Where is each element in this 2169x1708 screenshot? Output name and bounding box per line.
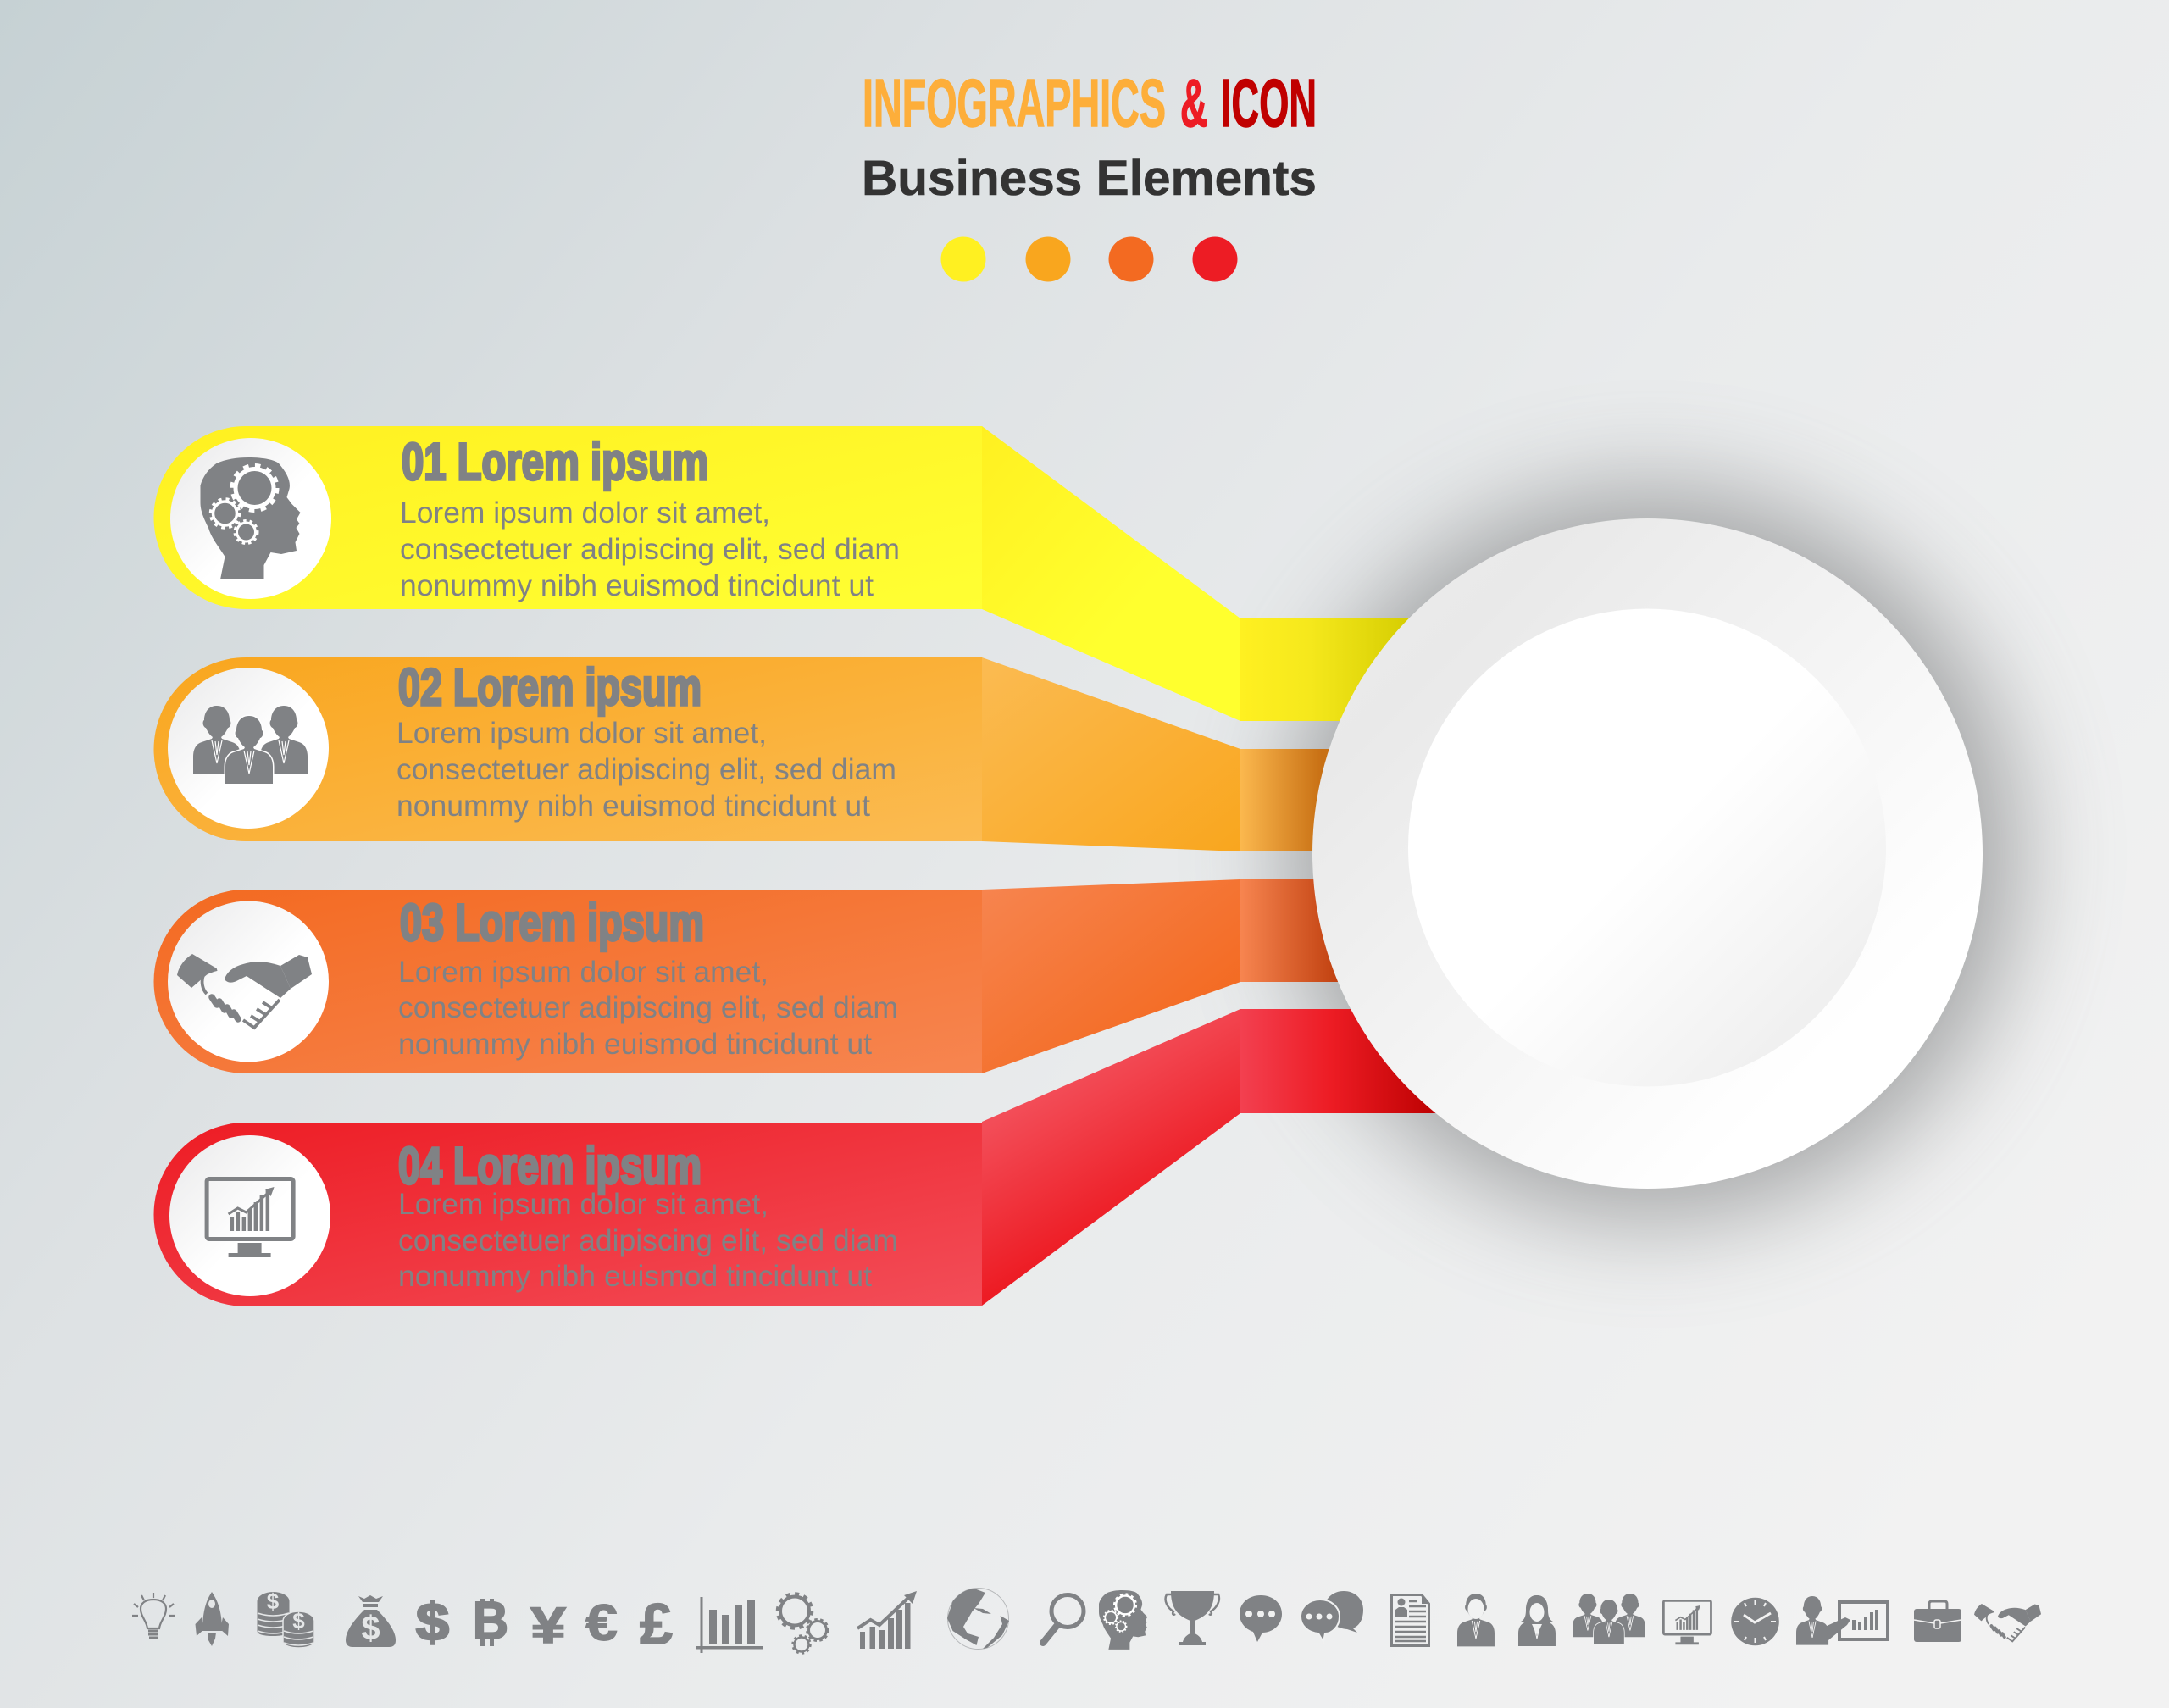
central disc xyxy=(1312,518,1983,1189)
icon: team small xyxy=(1573,1594,1645,1644)
title: INFOGRAPHICS xyxy=(863,65,1166,141)
icon: globe xyxy=(947,1588,1009,1649)
panel: step 03 xyxy=(154,879,1356,1073)
icon: bar chart xyxy=(696,1597,763,1653)
icon: light bulb xyxy=(132,1593,175,1638)
panel: step 02 xyxy=(154,657,1356,851)
icon: monitor chart small xyxy=(1663,1600,1711,1644)
icon: briefcase xyxy=(1914,1601,1961,1642)
text block 01: consectetuer adipiscing elit, sed diam xyxy=(400,533,900,566)
title: & xyxy=(1180,65,1207,141)
icon: dollar: $ xyxy=(416,1594,449,1652)
icon: trophy xyxy=(1166,1591,1219,1645)
icon: growth chart xyxy=(857,1591,917,1649)
text block 02: consectetuer adipiscing elit, sed diam xyxy=(397,753,896,786)
icon: coin stacks: $ xyxy=(267,1589,280,1614)
icon: conversation xyxy=(1301,1591,1363,1642)
icon: coin stacks: $ xyxy=(292,1608,305,1633)
heading 02: 02 Lorem ipsum xyxy=(398,658,702,716)
icon: resume document xyxy=(1391,1594,1429,1645)
colour dots xyxy=(940,237,1237,281)
heading 03: 03 Lorem ipsum xyxy=(400,894,704,951)
icon: monitor chart xyxy=(207,1179,293,1257)
icon: euro: € xyxy=(585,1594,618,1651)
icon: presenter xyxy=(1796,1596,1888,1645)
icon: rocket xyxy=(195,1592,229,1646)
panel: step 04 xyxy=(154,1009,1457,1306)
text block 01: Lorem ipsum dolor sit amet, xyxy=(400,496,770,530)
icon: team xyxy=(193,706,308,784)
icon: gears xyxy=(778,1594,829,1654)
icon: handshake small xyxy=(1974,1604,2041,1641)
text block 03 xyxy=(398,956,898,1061)
icon: clock xyxy=(1731,1598,1779,1645)
icon: coin stacks xyxy=(258,1589,314,1648)
text block 04: nonummy nibh euismod tincidunt ut xyxy=(398,1260,872,1293)
text block 02: nonummy nibh euismod tincidunt ut xyxy=(397,790,870,823)
icon: speech bubble xyxy=(1240,1595,1282,1642)
text block 03: nonummy nibh euismod tincidunt ut xyxy=(398,1028,872,1061)
text block 01: nonummy nibh euismod tincidunt ut xyxy=(400,569,874,602)
text block 02 xyxy=(397,717,896,823)
icon: businesswoman xyxy=(1518,1595,1556,1646)
icon: businessman xyxy=(1457,1594,1495,1646)
heading 01: 01 Lorem ipsum xyxy=(402,433,708,491)
disc shadow xyxy=(1288,490,2016,1218)
text block 04: Lorem ipsum dolor sit amet, xyxy=(398,1188,768,1221)
icon: magnifier xyxy=(1043,1594,1084,1643)
icon: yen: ¥ xyxy=(530,1597,567,1654)
subtitle: Business Elements xyxy=(862,151,1317,206)
icon: money bag: $ xyxy=(361,1610,380,1647)
icon: head with gears small xyxy=(1099,1590,1147,1650)
text block 04 xyxy=(398,1188,898,1293)
title: ICON xyxy=(1221,65,1317,141)
text block 02: Lorem ipsum dolor sit amet, xyxy=(397,717,767,750)
icon: money bag xyxy=(346,1595,396,1647)
heading 04: 04 Lorem ipsum xyxy=(398,1137,702,1195)
icon: bitcoin: B xyxy=(473,1592,508,1650)
icon row xyxy=(132,1588,2041,1656)
text block 04: consectetuer adipiscing elit, sed diam xyxy=(398,1224,898,1257)
icon: handshake xyxy=(177,954,312,1028)
icon: head with gears xyxy=(200,458,300,580)
text block 03: Lorem ipsum dolor sit amet, xyxy=(398,956,768,989)
panel: step 01 xyxy=(154,426,1457,721)
text block 03: consectetuer adipiscing elit, sed diam xyxy=(398,991,898,1024)
icon: pound: £ xyxy=(640,1592,673,1656)
text block 01 xyxy=(400,496,900,602)
